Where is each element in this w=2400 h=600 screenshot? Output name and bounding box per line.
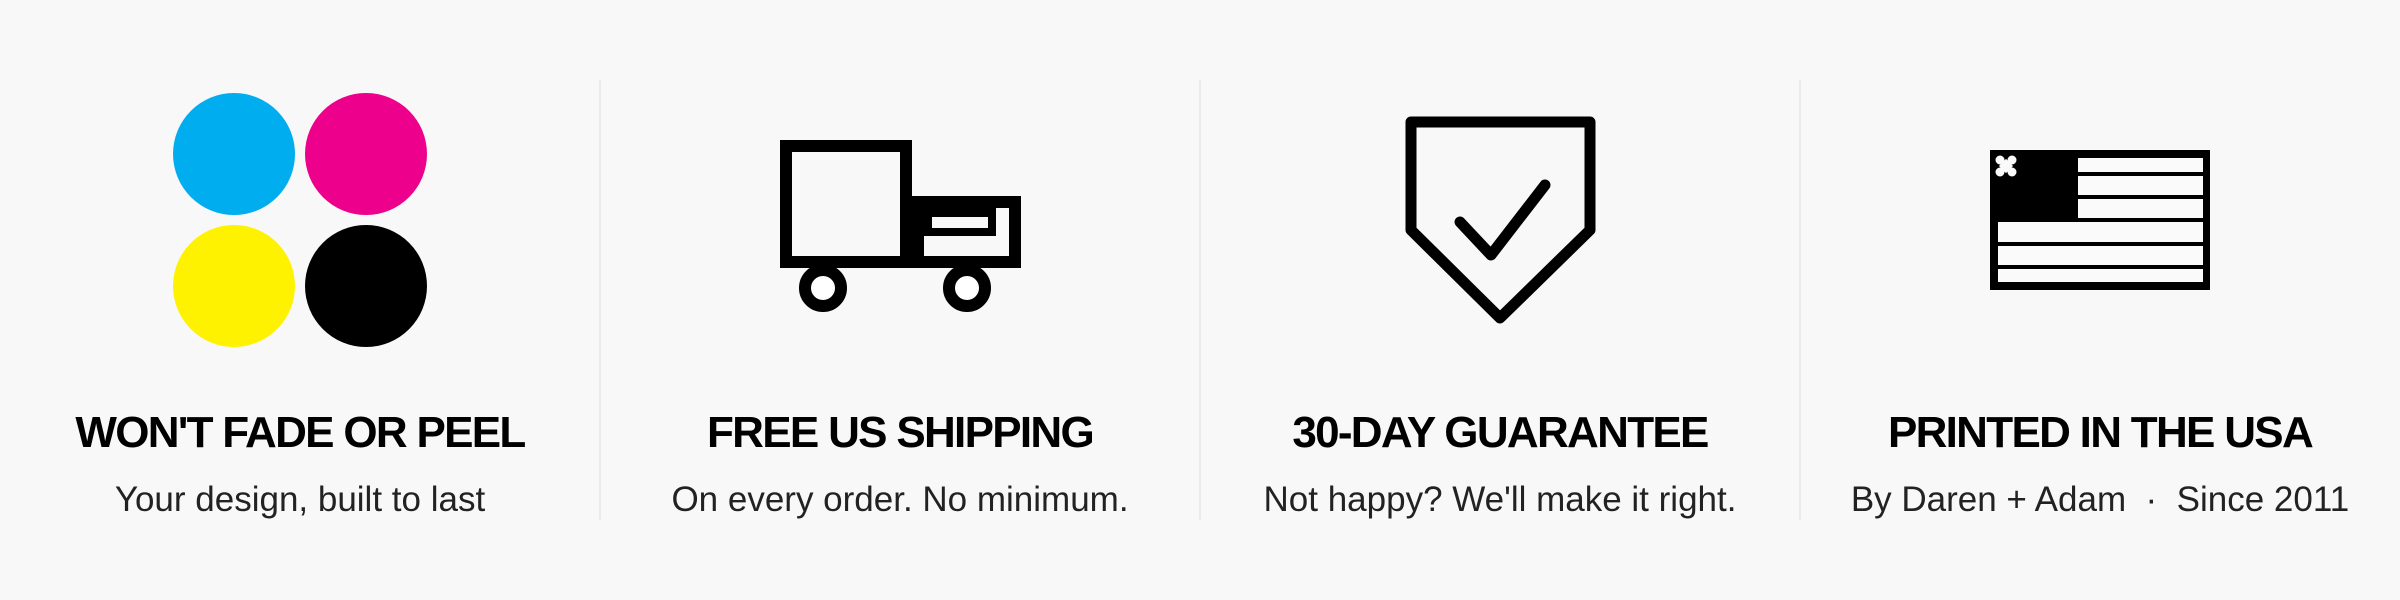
panel: guarantee — [1264, 116, 1736, 519]
icon: flag — [1990, 150, 2210, 290]
text: subtitle: Not happy? We'll make it right. — [1264, 480, 1736, 519]
text: subtitle: On every order. No minimum. — [671, 480, 1129, 519]
text: subtitle: By Daren + Adam · Since 2011 — [1851, 480, 2349, 519]
text: subtitle: Your design, built to last — [115, 480, 485, 519]
heading: 30-DAY GUARANTEE — [1292, 408, 1708, 457]
panel: won't fade — [75, 93, 525, 519]
panel: made in usa — [1851, 150, 2349, 519]
heading: WON'T FADE OR PEEL — [75, 408, 525, 457]
heading: FREE US SHIPPING — [707, 408, 1093, 457]
panel: shipping — [671, 140, 1129, 519]
icon: truck — [780, 140, 1021, 312]
heading: PRINTED IN THE USA — [1888, 408, 2312, 457]
icon: shield check — [1406, 116, 1596, 324]
icon: CMYK circles — [173, 93, 427, 347]
